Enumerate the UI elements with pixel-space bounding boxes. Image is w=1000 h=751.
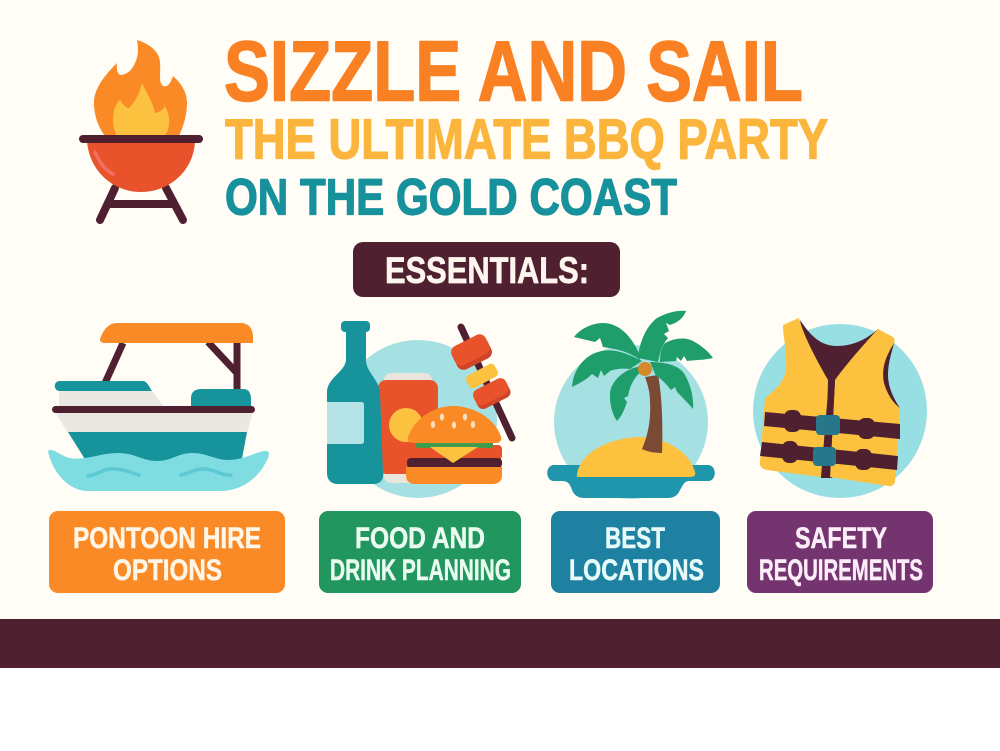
flame outer [94, 40, 187, 136]
skewer [449, 327, 513, 438]
heading: essentials: ESSENTIALS: [385, 249, 589, 291]
label: safety requirements: SAFETY [795, 522, 887, 555]
footer band [0, 619, 1000, 668]
teal hull [68, 432, 247, 464]
vest left panel [760, 318, 828, 477]
bow deck teal [55, 381, 152, 391]
grill rim [79, 135, 203, 143]
label: food and drink planning: FOOD AND [355, 522, 485, 555]
label: pontoon hire options [49, 511, 285, 593]
deck rail [52, 406, 255, 413]
center strip [821, 380, 835, 477]
canopy [100, 323, 253, 343]
fronds [572, 311, 713, 421]
backdrop circle [339, 340, 497, 498]
label: best locations [551, 511, 720, 593]
backdrop circle [753, 324, 927, 498]
buckles [816, 415, 840, 435]
coconut [638, 362, 652, 376]
upper hull white [59, 391, 164, 407]
water [547, 465, 715, 498]
lower hull white [55, 412, 253, 433]
soda can [378, 373, 438, 483]
label: safety requirements [747, 511, 933, 593]
seat teal [191, 389, 251, 407]
grill legs [100, 188, 183, 220]
straps [760, 410, 900, 470]
icon: tropical island [547, 311, 715, 499]
heading: essentials [353, 242, 620, 297]
grill bowl [87, 141, 195, 192]
ripples [88, 469, 231, 476]
bowl highlight [95, 152, 113, 174]
icon: barbecue grill with flames [79, 40, 203, 220]
vest interior [800, 320, 880, 478]
trunk [642, 375, 662, 453]
title [224, 24, 828, 226]
label: food and drink planning [319, 511, 521, 593]
sand [577, 437, 695, 477]
icon: food and drink [327, 321, 513, 498]
title line 3: ON THE GOLD COAST [225, 168, 677, 226]
burger [406, 406, 502, 484]
title line 1: SIZZLE AND SAIL [224, 24, 803, 120]
label: best locations: LOCATIONS [569, 554, 704, 587]
icon: life jacket [753, 318, 927, 498]
vest right panel [830, 329, 900, 486]
flame inner [113, 83, 169, 136]
label: pontoon hire options: PONTOON HIRE [73, 522, 261, 555]
label: pontoon hire options: OPTIONS [113, 554, 222, 587]
icon: pontoon boat [48, 323, 269, 491]
label: food and drink planning: DRINK PLANNING [330, 554, 511, 587]
canopy posts [105, 342, 237, 390]
backdrop circle [554, 345, 708, 499]
title line 2: THE ULTIMATE BBQ PARTY [225, 108, 828, 172]
label: best locations: BEST [605, 522, 665, 555]
water [48, 450, 269, 491]
label: safety requirements: REQUIREMENTS [759, 554, 923, 587]
right armhole [883, 343, 900, 408]
bottle [327, 321, 383, 484]
